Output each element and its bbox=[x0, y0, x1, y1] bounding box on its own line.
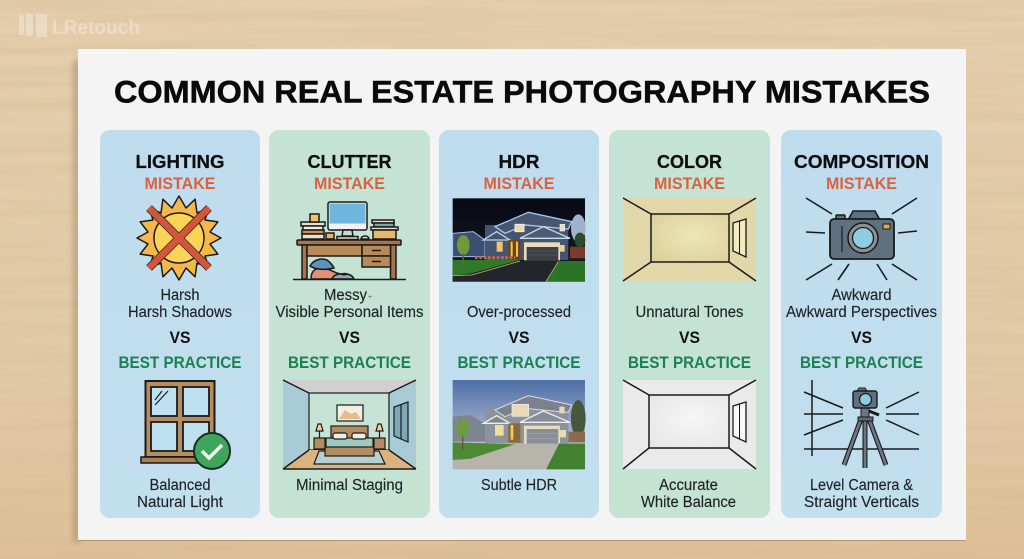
icon: window with check mark bbox=[141, 381, 230, 469]
panel: composition bbox=[781, 130, 942, 518]
text: unnatural tones: Unnatural Tones bbox=[636, 304, 744, 321]
text: accurate white balance bbox=[641, 477, 736, 511]
label: vs: VS bbox=[508, 329, 530, 347]
text: balanced natural light bbox=[137, 477, 224, 511]
text: over-processed: Over-processed bbox=[467, 304, 571, 321]
text: harsh shadows: Harsh Shadows bbox=[128, 304, 232, 321]
panel: clutter bbox=[269, 130, 430, 518]
label: mistake: MISTAKE bbox=[826, 174, 897, 193]
label: best practice: BEST PRACTICE bbox=[628, 353, 751, 372]
icon: staged bedroom bbox=[283, 380, 416, 469]
label: mistake: MISTAKE bbox=[144, 174, 216, 193]
label: best practice: BEST PRACTICE bbox=[288, 353, 411, 372]
label: mistake: MISTAKE bbox=[484, 174, 554, 193]
text: minimal staging: Minimal Staging bbox=[296, 477, 403, 494]
label: vs: VS bbox=[170, 329, 190, 347]
label: best practice: BEST PRACTICE bbox=[118, 353, 242, 372]
panel: color bbox=[609, 130, 770, 518]
icon: camera with radiating lines bbox=[806, 198, 917, 280]
icon: neutral white room bbox=[623, 380, 756, 469]
panel: lighting bbox=[100, 130, 260, 518]
watermark: LRetouch logo: LRetouch bbox=[52, 17, 140, 39]
icon: yellow-tinted room bbox=[623, 198, 756, 282]
label: mistake: MISTAKE bbox=[314, 174, 385, 193]
text: awkward perspectives: Awkward Perspectives bbox=[786, 304, 937, 321]
icon: crossed-out sun bbox=[137, 196, 221, 280]
white poster panel bbox=[73, 49, 966, 542]
text: subtle hdr: Subtle HDR bbox=[481, 477, 557, 494]
text: harsh shadows bbox=[128, 287, 232, 321]
heading: color: COLOR bbox=[657, 152, 722, 172]
heading: hdr: HDR bbox=[498, 152, 540, 172]
text: messy visible personal items bbox=[276, 287, 424, 321]
text: level camera straight verticals: Level Camera & bbox=[810, 477, 914, 494]
text: messy visible personal items: ÷ bbox=[368, 294, 372, 301]
title: COMMON REAL ESTATE PHOTOGRAPHY MISTAKES bbox=[114, 74, 930, 110]
heading: clutter: CLUTTER bbox=[308, 152, 392, 172]
label: vs: VS bbox=[339, 329, 360, 347]
panel: hdr bbox=[439, 130, 599, 518]
text: awkward perspectives: Awkward bbox=[832, 287, 892, 304]
heading: lighting: LIGHTING bbox=[136, 152, 224, 172]
heading: composition: COMPOSITION bbox=[794, 152, 929, 172]
text: balanced natural light: Balanced bbox=[150, 477, 210, 494]
label: vs: VS bbox=[851, 329, 872, 347]
text: level camera straight verticals bbox=[804, 477, 919, 511]
text: messy visible personal items: Visible Personal Items bbox=[276, 304, 424, 321]
text: messy visible personal items: Messy bbox=[324, 287, 367, 304]
photo: over-processed house bbox=[453, 198, 586, 282]
label: best practice: BEST PRACTICE bbox=[800, 353, 923, 372]
label: best practice: BEST PRACTICE bbox=[458, 353, 580, 372]
photo: subtle hdr house bbox=[453, 380, 586, 469]
text: balanced natural light: Natural Light bbox=[137, 494, 224, 511]
text: awkward perspectives bbox=[786, 287, 937, 321]
icon: messy desk bbox=[293, 202, 406, 280]
text: level camera straight verticals: Straight Verticals bbox=[804, 494, 919, 511]
watermark: LRetouch logo bbox=[19, 14, 140, 39]
text: harsh shadows: Harsh bbox=[160, 287, 200, 304]
label: vs: VS bbox=[679, 329, 700, 347]
text: accurate white balance: Accurate bbox=[659, 477, 718, 494]
icon: level camera on tripod bbox=[804, 380, 919, 468]
text: accurate white balance: White Balance bbox=[641, 494, 736, 511]
label: mistake: MISTAKE bbox=[654, 174, 725, 193]
